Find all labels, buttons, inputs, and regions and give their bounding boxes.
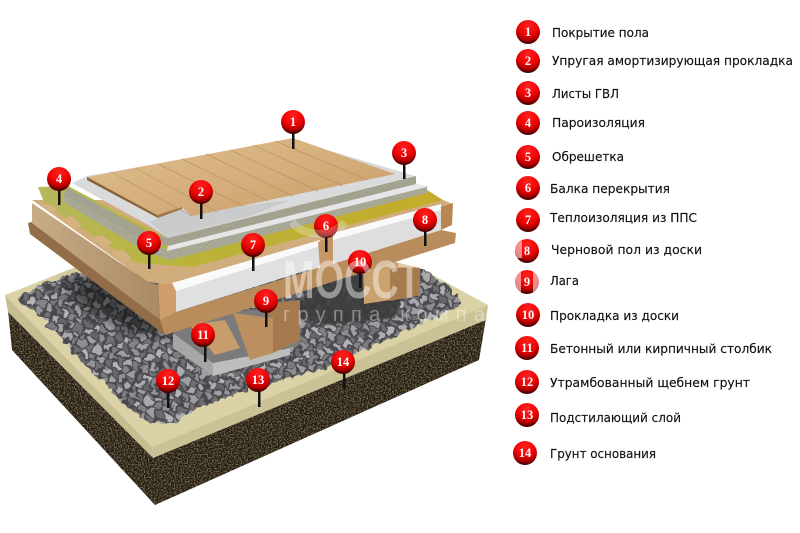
- gypsum fibre sheets: [64, 140, 427, 260]
- legend item 6: Балка перекрытия: [550, 181, 670, 196]
- sand bedding layer: [5, 266, 488, 458]
- legend item 1: 1: [525, 25, 531, 39]
- marker 5: [137, 231, 161, 269]
- legend item 9: Лага: [550, 273, 579, 288]
- marker 1: 1: [290, 115, 296, 129]
- lower sheet side: [64, 186, 427, 260]
- beam top face: [32, 200, 453, 285]
- legend item 9: [515, 270, 579, 294]
- marker 3: [392, 141, 416, 179]
- legend item 2: [516, 49, 793, 73]
- left beam face: [32, 203, 160, 320]
- floor covering: [87, 138, 395, 218]
- legend item 14: [513, 441, 656, 465]
- legend item 7: Теплоизоляция из ППС: [549, 210, 697, 225]
- legend item 13: 13: [521, 408, 533, 422]
- legend item 11: 11: [521, 341, 533, 355]
- marker 8: [413, 208, 437, 246]
- legend item 7: 7: [525, 213, 531, 227]
- legend item 12: [515, 370, 750, 394]
- marker 7: 7: [250, 238, 256, 252]
- legend item 6: [516, 176, 670, 200]
- timber frame: [28, 200, 456, 335]
- watermark: [283, 222, 486, 326]
- legend item 7: [516, 208, 697, 232]
- board pad: [363, 262, 420, 304]
- marker 5: 5: [146, 236, 152, 250]
- right beam end: [441, 203, 453, 230]
- marker 12: [156, 369, 180, 408]
- marker 10: [348, 250, 372, 288]
- legend item 14: 14: [519, 446, 532, 460]
- upper sheet top: [72, 140, 415, 238]
- legend item 3: Листы ГВЛ: [552, 86, 619, 101]
- resilient underlay: [150, 200, 290, 238]
- legend item 2: Упругая амортизирующая прокладка: [552, 53, 793, 68]
- legend item 4: 4: [525, 116, 532, 130]
- legend item 13: [515, 403, 681, 427]
- marker 11: [191, 323, 215, 362]
- concrete pillars, pads and joists: [173, 262, 420, 376]
- legend item 14: Грунт основания: [550, 446, 656, 461]
- lower sheet top: [167, 183, 427, 251]
- marker 9: 9: [263, 294, 269, 308]
- marker 9: [254, 289, 278, 327]
- upper sheet side: [66, 176, 416, 246]
- legend item 8: 8: [524, 244, 530, 258]
- legend item 9: 9: [524, 275, 530, 289]
- soil layer: [8, 310, 486, 505]
- legend: [513, 20, 793, 465]
- marker 2: [189, 180, 213, 219]
- marker 6: 6: [323, 219, 329, 233]
- legend item 8: Черновой пол из доски: [551, 242, 702, 257]
- foam insulation: [172, 204, 441, 312]
- marker 11: 11: [197, 328, 209, 342]
- legend item 3: [516, 81, 619, 105]
- floor beam: [318, 236, 333, 268]
- marker 2: 2: [198, 185, 204, 199]
- legend item 11: [515, 336, 772, 360]
- marker 8: 8: [422, 213, 428, 227]
- legend item 4: Пароизоляция: [552, 115, 645, 130]
- legend item 5: Обрешетка: [552, 149, 624, 164]
- watermark: группа компа: [283, 304, 486, 326]
- marker 1: [281, 110, 305, 149]
- rough board floor: [28, 222, 456, 335]
- legend item 5: 5: [525, 150, 531, 164]
- marker 13: 13: [252, 373, 264, 387]
- rear pillar shadow: [290, 268, 410, 325]
- legend item 10: Прокладка из доски: [550, 308, 679, 323]
- floor joist: [190, 300, 300, 360]
- lathing battens: [41, 204, 132, 263]
- legend item 11: Бетонный или кирпичный столбик: [550, 341, 772, 356]
- marker 3: 3: [401, 146, 407, 160]
- legend item 13: Подстилающий слой: [550, 410, 681, 425]
- vapour barrier: [38, 186, 443, 267]
- legend item 6: 6: [525, 181, 531, 195]
- legend item 12: 12: [521, 375, 533, 389]
- legend item 10: [516, 303, 679, 327]
- corner post: [158, 283, 176, 320]
- legend item 8: [515, 239, 702, 263]
- marker 14: [331, 350, 355, 389]
- legend item 3: 3: [525, 86, 531, 100]
- legend item 5: [516, 145, 624, 169]
- watermark: МОССТ: [283, 250, 421, 310]
- legend item 1: Покрытие пола: [552, 25, 649, 40]
- marker 13: [246, 368, 270, 407]
- concrete pillar: [173, 305, 300, 376]
- legend item 4: [516, 111, 645, 135]
- ground block: [5, 266, 488, 505]
- marker 7: [241, 233, 265, 271]
- compacted gravel: [17, 268, 463, 423]
- legend item 12: Утрамбованный щебнем грунт: [550, 375, 750, 390]
- marker 6: [314, 214, 338, 252]
- legend item 1: [516, 20, 649, 44]
- marker 14: 14: [337, 355, 350, 369]
- marker 12: 12: [162, 374, 174, 388]
- marker 4: [47, 167, 71, 205]
- legend item 10: 10: [522, 308, 534, 322]
- marker 10: 10: [354, 255, 366, 269]
- marker 4: 4: [56, 172, 63, 186]
- legend item 2: 2: [525, 54, 531, 68]
